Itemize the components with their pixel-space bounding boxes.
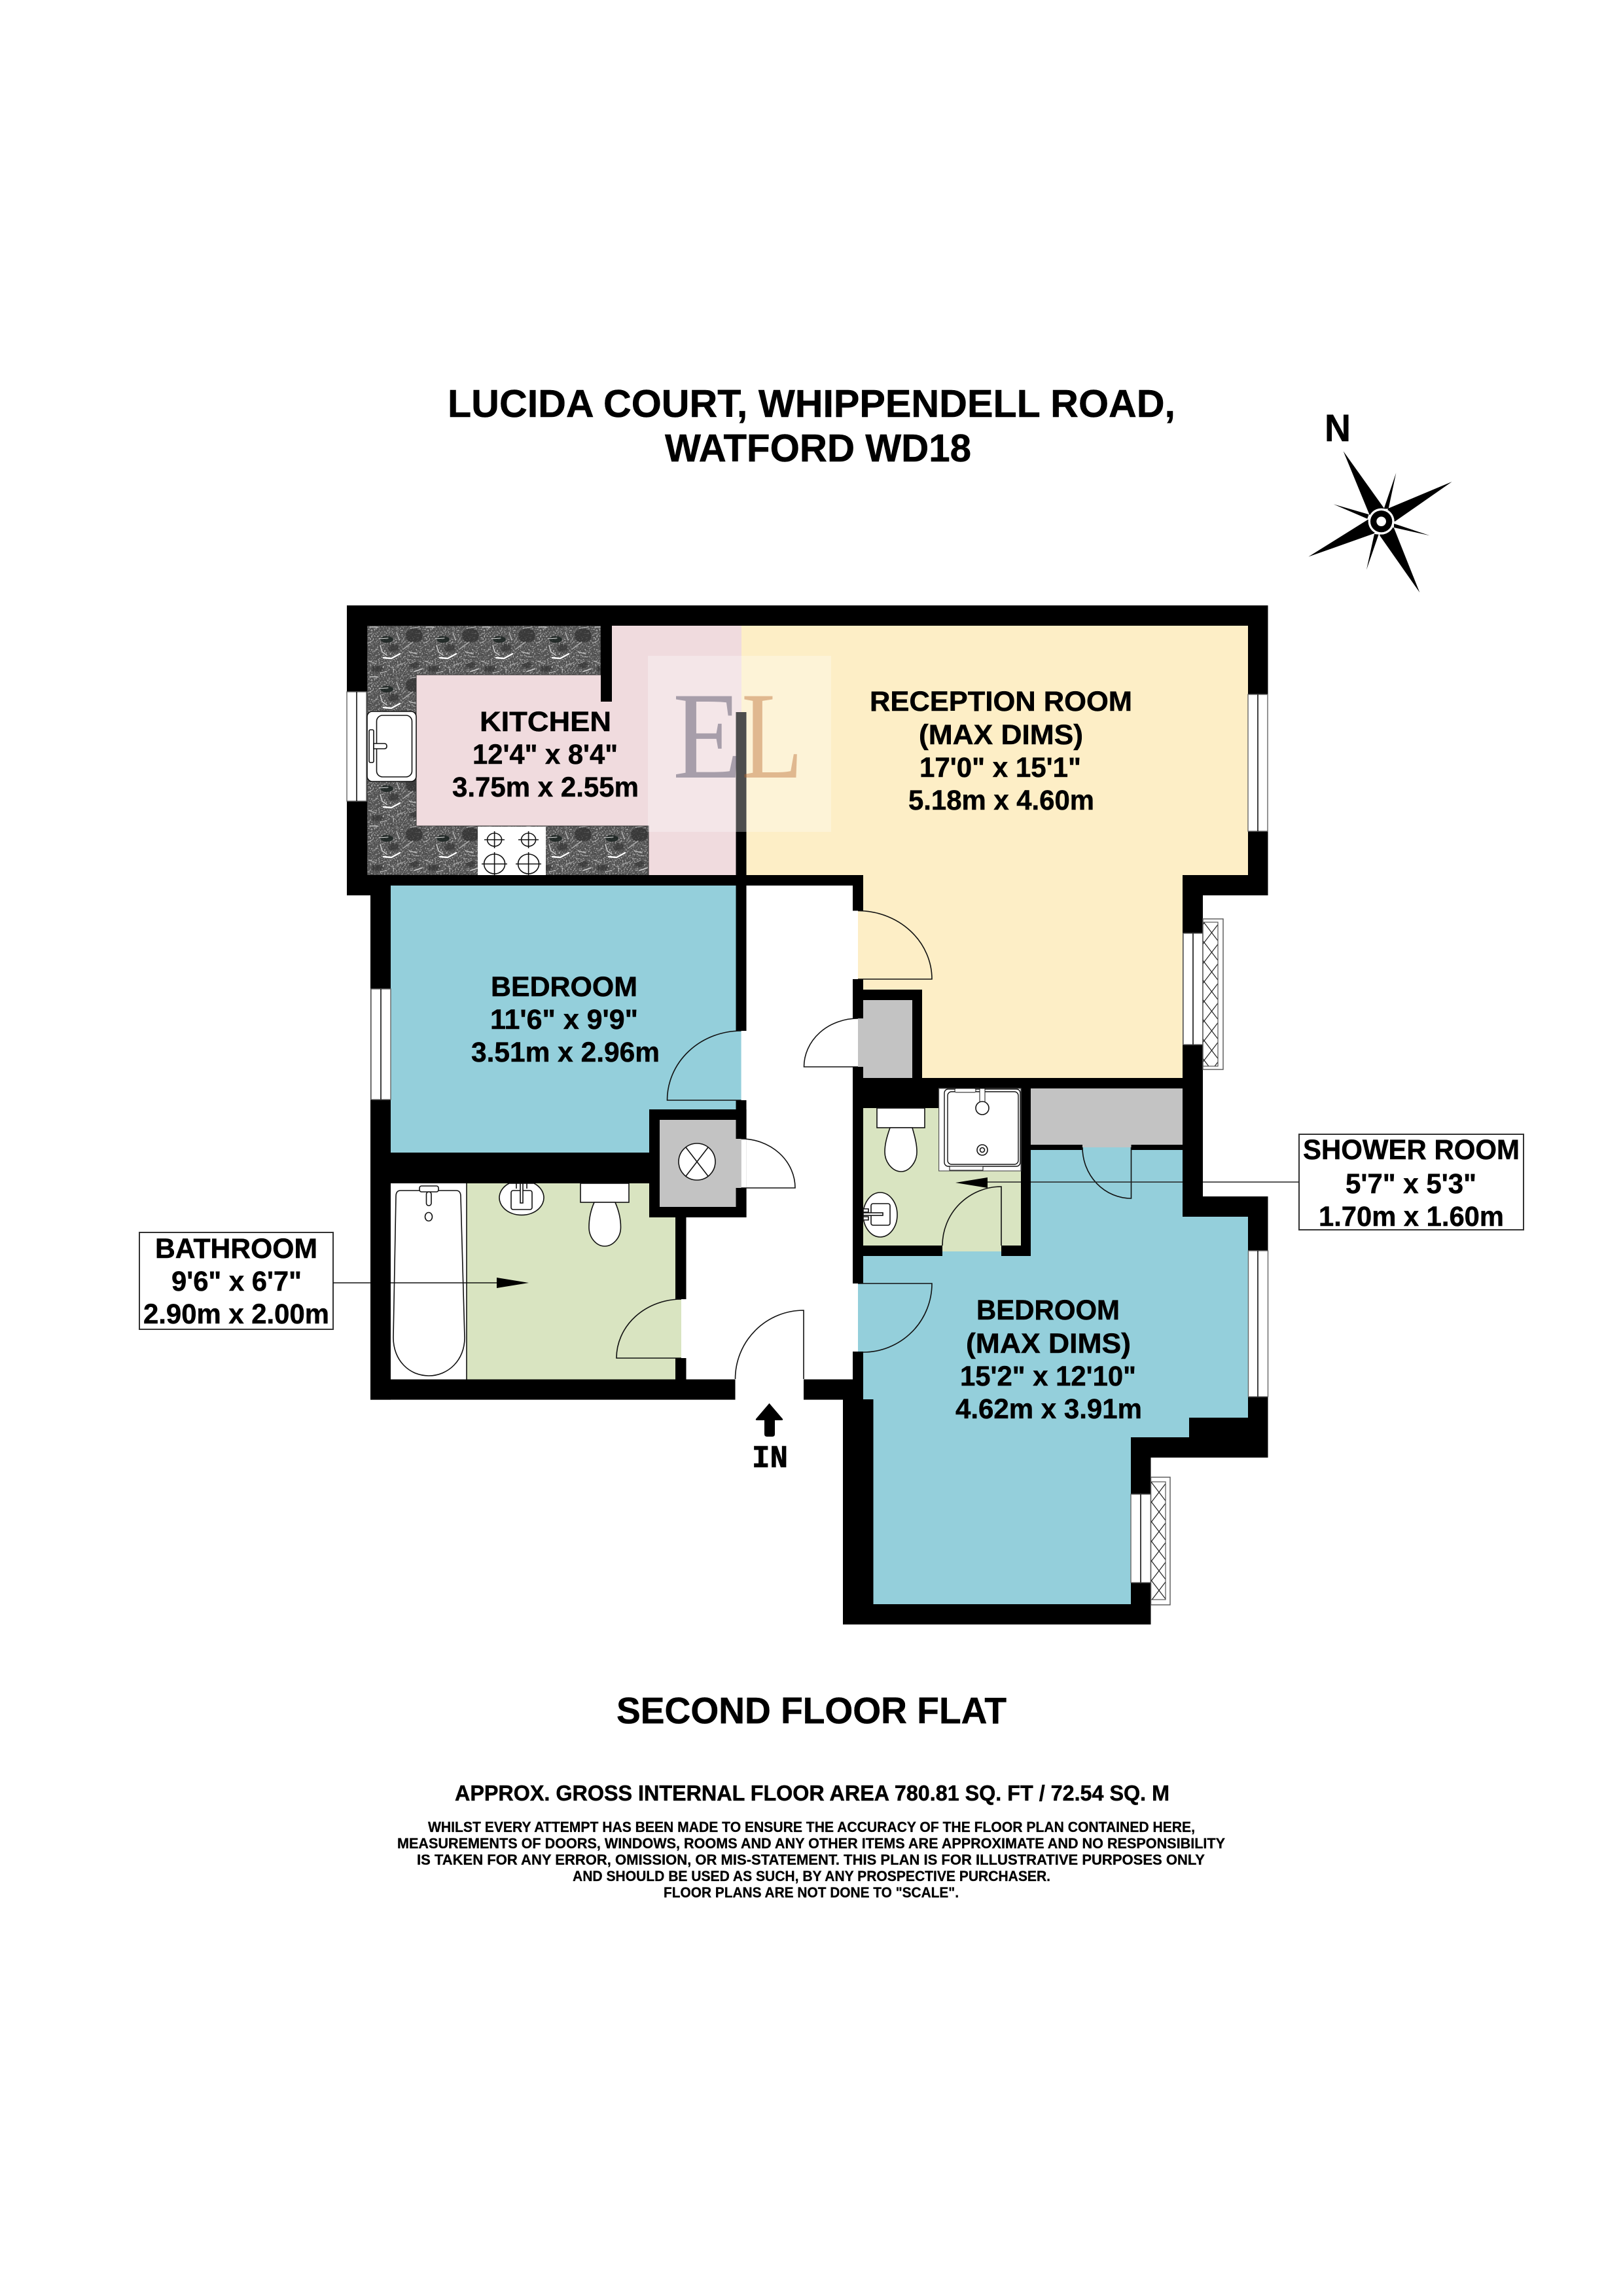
arrow: bathroom callout — [333, 1278, 529, 1288]
label: bedroom one: 11'6" x 9'9" — [490, 1004, 638, 1035]
door: store cupboard — [1082, 1147, 1131, 1198]
label: bedroom two — [955, 1295, 1142, 1425]
label: kitchen: 12'4" x 8'4" — [473, 739, 618, 770]
door: bedroom one — [668, 1031, 741, 1100]
callout: shower room: 5'7" x 5'3" — [1346, 1168, 1476, 1200]
disclaimer: MEASUREMENTS OF DOORS, WINDOWS, ROOMS AND ANY OTHER ITEMS ARE APPROXIMATE AND NO RESPONSIBILITY — [397, 1835, 1225, 1852]
arrow: shower room callout — [955, 1177, 1299, 1188]
door: bathroom — [616, 1299, 681, 1358]
door: cylinder cupboard — [741, 1139, 795, 1188]
cupboard: hall cylinder — [649, 1109, 747, 1217]
title: WATFORD WD18 — [665, 427, 971, 470]
logo watermark — [648, 656, 831, 832]
room: bathroom floor — [467, 1183, 681, 1380]
window: reception east — [1248, 694, 1268, 831]
compass rose — [1308, 407, 1452, 592]
label: reception room: (MAX DIMS) — [919, 719, 1083, 751]
cupboard gray floor — [660, 1120, 741, 1207]
callout: shower room — [1299, 1134, 1524, 1232]
disclaimer: AND SHOULD BE USED AS SUCH, BY ANY PROSPECTIVE PURCHASER. — [573, 1868, 1050, 1884]
logo watermark: E — [673, 668, 742, 805]
doors — [616, 911, 1131, 1379]
bathroom basin — [499, 1183, 544, 1215]
door: reception — [858, 911, 932, 979]
label: reception room: RECEPTION ROOM — [870, 686, 1132, 717]
callout: bathroom: 2.90m x 2.00m — [143, 1299, 329, 1330]
kitchen hob — [478, 827, 546, 875]
label: bedroom two: (MAX DIMS) — [966, 1328, 1131, 1359]
store door opening — [1082, 1145, 1131, 1147]
bath — [391, 1183, 467, 1380]
window: bedroom one — [371, 989, 391, 1100]
label: bedroom one: 3.51m x 2.96m — [471, 1037, 660, 1068]
bathroom toilet — [580, 1183, 629, 1246]
window: kitchen — [347, 692, 366, 801]
floor plan — [139, 605, 1524, 1624]
door: entrance — [736, 1310, 804, 1379]
label: bedroom two: BEDROOM — [976, 1295, 1120, 1326]
label: reception room: 5.18m x 4.60m — [908, 785, 1094, 816]
kitchen worktop — [367, 626, 649, 875]
room: bedroom two floor — [858, 1147, 1248, 1604]
callout: bathroom: BATHROOM — [155, 1233, 317, 1265]
walls — [347, 605, 1268, 1624]
callout: bathroom: 9'6" x 6'7" — [171, 1266, 302, 1297]
room: shower room floor — [863, 1108, 1021, 1251]
label: reception room — [870, 686, 1132, 816]
floor area: APPROX. GROSS INTERNAL FLOOR AREA 780.81 SQ. FT / 72.54 SQ. M — [455, 1781, 1169, 1805]
shower room toilet — [877, 1108, 925, 1172]
door opening of cylinder cupboard — [741, 1139, 747, 1188]
label: bedroom two: 15'2" x 12'10" — [960, 1361, 1136, 1392]
window and balcony: bedroom two — [1131, 1477, 1170, 1605]
label: kitchen: 3.75m x 2.55m — [452, 772, 639, 803]
disclaimer: WHILST EVERY ATTEMPT HAS BEEN MADE TO ENSURE THE ACCURACY OF THE FLOOR PLAN CONTAINED HERE, — [428, 1819, 1195, 1835]
disclaimer: FLOOR PLANS ARE NOT DONE TO "SCALE". — [664, 1884, 959, 1901]
title: LUCIDA COURT, WHIPPENDELL ROAD, — [448, 382, 1175, 425]
callout: bathroom — [139, 1232, 333, 1330]
label: bedroom two: 4.62m x 3.91m — [955, 1393, 1142, 1425]
label: bedroom one — [471, 971, 660, 1068]
title — [448, 382, 1175, 470]
logo watermark: L — [741, 668, 803, 805]
callout: shower room: SHOWER ROOM — [1303, 1134, 1520, 1166]
window: bedroom two east — [1249, 1251, 1268, 1397]
label: entrance: IN — [752, 1441, 788, 1477]
label: kitchen: KITCHEN — [480, 706, 611, 738]
shower room basin — [863, 1193, 897, 1237]
kitchen sink — [367, 711, 416, 781]
door: hall cupboard — [804, 1018, 858, 1067]
door: bedroom two — [858, 1283, 932, 1352]
cupboard: hall storage — [858, 1000, 912, 1078]
arrow: entrance — [756, 1403, 783, 1437]
window and balcony: reception — [1183, 919, 1223, 1069]
store cupboard — [1031, 1088, 1183, 1145]
hall cupboard fan — [679, 1143, 715, 1180]
room: reception floor — [741, 626, 1248, 1079]
room: kitchen floor — [367, 626, 741, 875]
disclaimer: IS TAKEN FOR ANY ERROR, OMISSION, OR MIS-STATEMENT. THIS PLAN IS FOR ILLUSTRATIVE PURPOSES ONLY — [417, 1852, 1205, 1868]
heading: floor name: SECOND FLOOR FLAT — [616, 1690, 1007, 1732]
label: kitchen — [452, 706, 639, 803]
label: bedroom one: BEDROOM — [491, 971, 637, 1003]
room: bedroom one floor — [391, 886, 741, 1153]
door: shower room — [942, 1187, 1001, 1246]
label: reception room: 17'0" x 15'1" — [919, 752, 1081, 783]
compass rose: N — [1325, 407, 1351, 450]
disclaimer — [397, 1819, 1225, 1901]
shower tray — [939, 1088, 1021, 1171]
callout: shower room: 1.70m x 1.60m — [1319, 1201, 1504, 1232]
